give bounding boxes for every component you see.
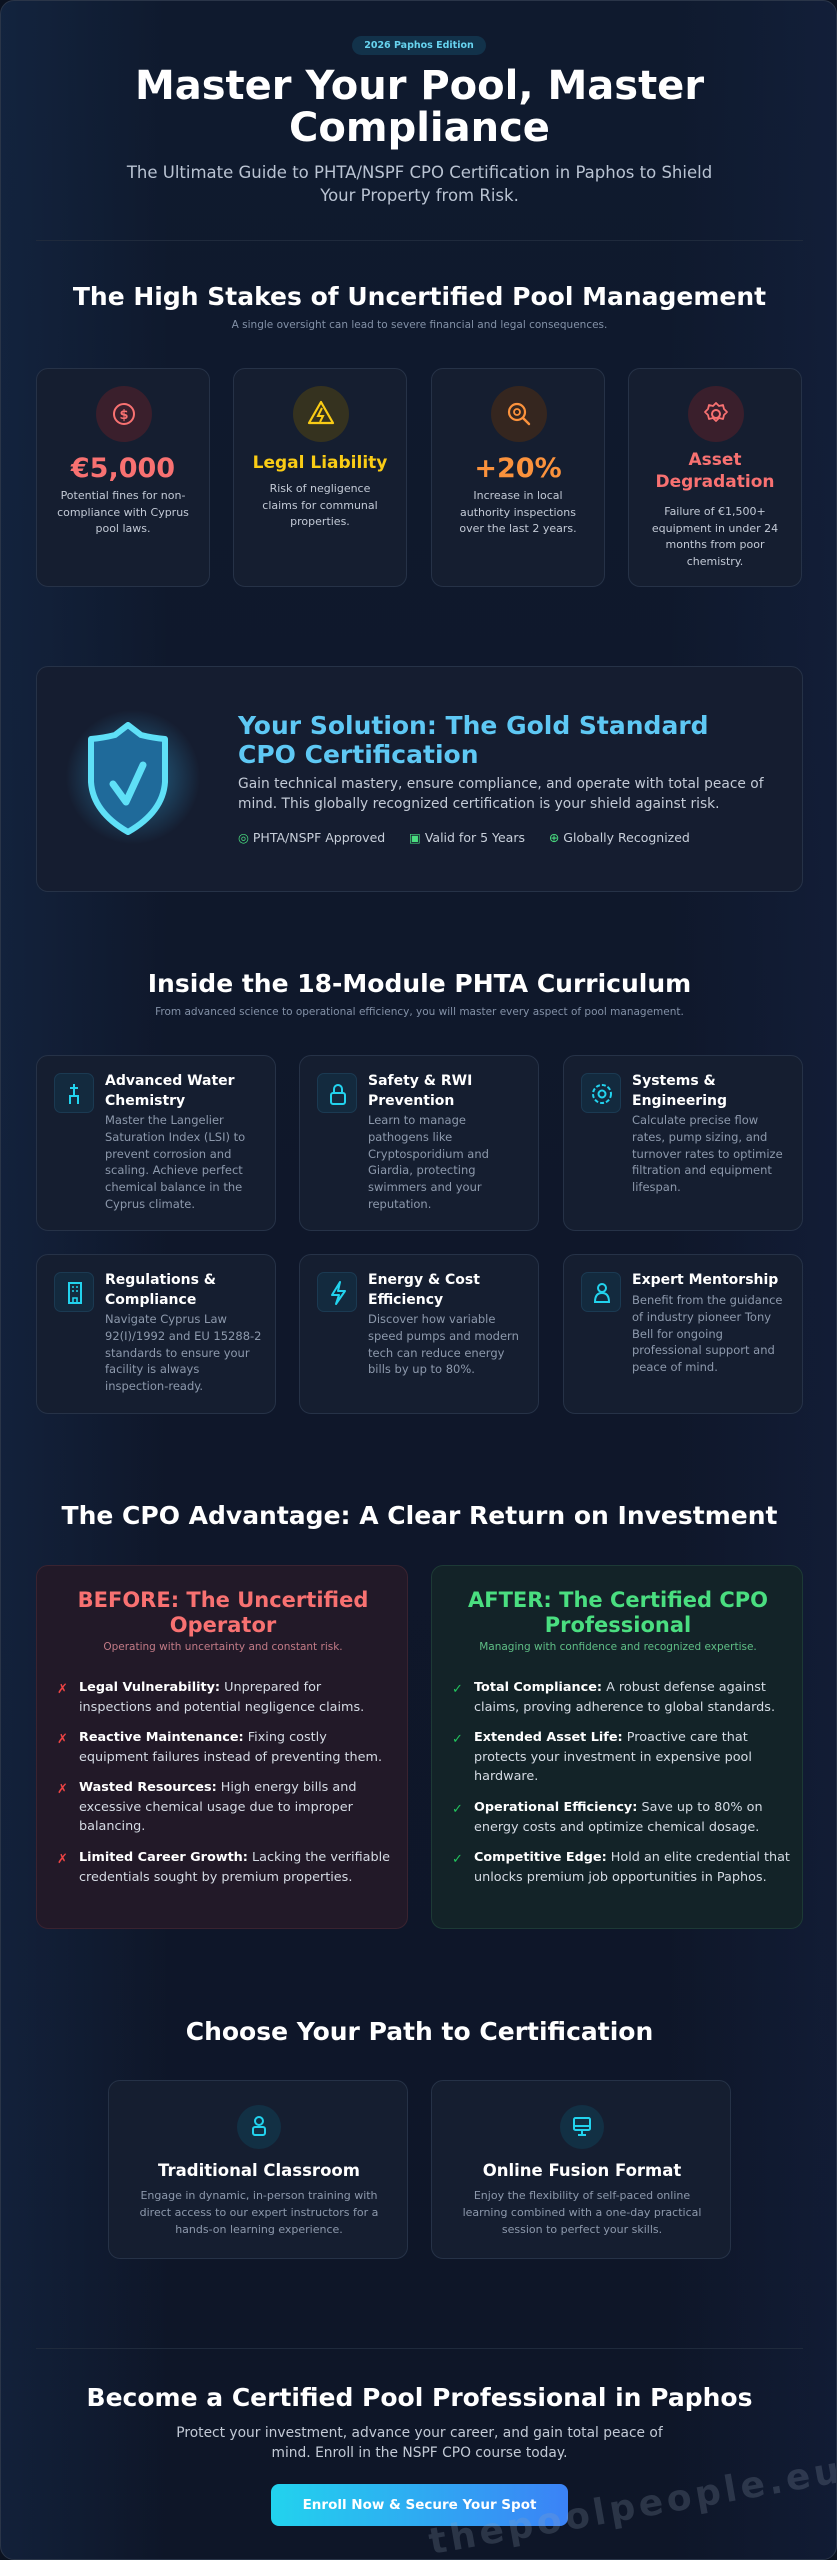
solution heading: Your Solution: The Gold Standard CPO Certification bbox=[238, 711, 709, 769]
panel: module energy bbox=[299, 1254, 539, 1414]
subheading: high stakes: A single oversight can lead to severe financial and legal consequences. bbox=[232, 319, 607, 331]
stat description: Failure of €1,500+ equipment in under 24 months from poor chemistry. bbox=[652, 505, 778, 568]
after list: Competitive Edge: Hold an elite credential that unlocks premium job opportunities in Paphos. bbox=[474, 1850, 790, 1884]
after list bbox=[452, 1680, 790, 1884]
panel: module mentorship bbox=[563, 1254, 803, 1414]
after list: Extended Asset Life: Proactive care that protects your investment in expensive pool hardware. bbox=[474, 1730, 752, 1784]
stat value: Legal Liability bbox=[253, 453, 387, 473]
stat value: Asset bbox=[688, 450, 742, 470]
panel: before bbox=[36, 1565, 408, 1929]
panel: module safety: Learn to manage pathogens like Cryptosporidium and Giardia, protecting swimmers and your reputation. bbox=[368, 1113, 489, 1211]
panel: module water chemistry bbox=[36, 1055, 276, 1231]
heading: advantage: The CPO Advantage: A Clear Return on Investment bbox=[62, 1501, 777, 1530]
stat value: +20% bbox=[474, 453, 562, 484]
stat value bbox=[655, 450, 775, 492]
badges: ◎ PHTA/NSPF Approved ▣ Valid for 5 Years ⊕ Globally Recognized bbox=[238, 830, 690, 845]
icon: euro coin: $ bbox=[119, 408, 129, 423]
before list: ✗ bbox=[57, 1782, 68, 1797]
panel: solution bbox=[36, 666, 803, 892]
panel: stat asset bbox=[628, 368, 802, 587]
icon: lock bbox=[317, 1073, 357, 1113]
before heading: BEFORE: The Uncertified bbox=[78, 1588, 368, 1612]
button: enroll: Enroll Now & Secure Your Spot bbox=[303, 2497, 536, 2513]
after list: ✓ bbox=[452, 1732, 463, 1747]
solution text: Gain technical mastery, ensure compliance, and operate with total peace of mind. This globally recognized certification is your shield against risk. bbox=[238, 776, 764, 812]
after list: ✓ bbox=[452, 1802, 463, 1817]
panel: module systems: Systems & Engineering bbox=[632, 1073, 727, 1108]
before list: ✗ bbox=[57, 1682, 68, 1697]
icon: gear bbox=[581, 1073, 621, 1113]
after heading bbox=[468, 1588, 768, 1637]
icon: shield bbox=[71, 715, 195, 839]
panel: module systems bbox=[563, 1055, 803, 1231]
panel: module energy: Energy & Cost Efficiency bbox=[368, 1272, 480, 1308]
panel: module safety: Safety & RWI Prevention bbox=[368, 1073, 472, 1108]
before list: ✗ bbox=[57, 1732, 68, 1747]
before list: Limited Career Growth: Lacking the verifiable credentials sought by premium properties. bbox=[79, 1850, 390, 1884]
panel: module water chemistry: Master the Langelier Saturation Index (LSI) to prevent corrosion and scaling. Achieve perfect chemical balance in the Cyprus climate. bbox=[105, 1113, 245, 1211]
subheading: curriculum: From advanced science to operational efficiency, you will master every aspect of pool management. bbox=[155, 1006, 684, 1018]
icon: classroom bbox=[237, 2105, 281, 2149]
title bbox=[135, 63, 704, 151]
online text: Enjoy the flexibility of self-paced online learning combined with a one-day practical session to perfect your skills. bbox=[463, 2189, 701, 2236]
classroom text: Engage in dynamic, in-person training with direct access to our expert instructors for a hands-on learning experience. bbox=[140, 2189, 378, 2236]
before heading: Operator bbox=[170, 1613, 276, 1637]
before sub: Operating with uncertainty and constant risk. bbox=[103, 1641, 343, 1653]
icon: monitor bbox=[560, 2105, 604, 2149]
stat value: €5,000 bbox=[71, 453, 175, 484]
stat description: Risk of negligence claims for communal properties. bbox=[262, 482, 378, 528]
heading: CTA: Become a Certified Pool Professional in Paphos bbox=[87, 2383, 752, 2412]
icon: chemistry bbox=[54, 1073, 94, 1113]
badge: edition bbox=[352, 36, 486, 55]
after list: Operational Efficiency: Save up to 80% on energy costs and optimize chemical dosage. bbox=[474, 1800, 763, 1834]
stat description: Potential fines for non-compliance with Cyprus pool laws. bbox=[57, 489, 189, 535]
CTA text: Protect your investment, advance your career, and gain total peace of mind. Enroll in the NSPF CPO course today. bbox=[176, 2425, 663, 2461]
icon: building bbox=[54, 1272, 94, 1312]
title: Compliance bbox=[289, 105, 550, 151]
after list: Total Compliance: A robust defense against claims, proving adherence to global standards. bbox=[474, 1680, 775, 1714]
panel: classroom bbox=[108, 2080, 408, 2259]
panel: module energy: Discover how variable speed pumps and modern tech can reduce energy bills by up to 80%. bbox=[368, 1312, 519, 1376]
stat value: Degradation bbox=[655, 472, 775, 492]
panel: module regulations: Navigate Cyprus Law 92(I)/1992 and EU 15288-2 standards to ensure your facility is always inspection-ready. bbox=[105, 1312, 261, 1393]
panel: module mentorship: Expert Mentorship bbox=[632, 1272, 778, 1288]
stat description: Increase in local authority inspections over the last 2 years. bbox=[459, 489, 577, 535]
before list: Reactive Maintenance: Fixing costly equipment failures instead of preventing them. bbox=[79, 1730, 382, 1764]
subtitle: The Ultimate Guide to PHTA/NSPF CPO Certification in Paphos to Shield Your Property from Risk. bbox=[127, 163, 712, 205]
heading: high stakes: The High Stakes of Uncertified Pool Management bbox=[73, 282, 766, 311]
panel: module systems: Calculate precise flow rates, pump sizing, and turnover rates to optimize filtration and equipment lifespan. bbox=[632, 1113, 783, 1194]
before list bbox=[57, 1680, 390, 1884]
panel: online bbox=[431, 2080, 731, 2259]
after heading: AFTER: The Certified CPO bbox=[468, 1588, 768, 1612]
panel: stat legal bbox=[233, 368, 407, 587]
panel: module regulations: Regulations & Compliance bbox=[105, 1272, 216, 1308]
after heading: Professional bbox=[545, 1613, 691, 1637]
badge: edition: 2026 Paphos Edition bbox=[364, 40, 474, 51]
title: Master Your Pool, Master bbox=[135, 63, 704, 109]
icon: euro coin bbox=[96, 386, 152, 442]
after sub: Managing with confidence and recognized expertise. bbox=[479, 1641, 757, 1653]
icon: magnifier bbox=[491, 386, 547, 442]
heading: curriculum: Inside the 18-Module PHTA Curriculum bbox=[148, 969, 691, 998]
button: enroll bbox=[271, 2484, 568, 2526]
panel: stat fines bbox=[36, 368, 210, 587]
before list: Wasted Resources: High energy bills and excessive chemical usage due to improper balancing. bbox=[79, 1780, 356, 1834]
icon: warning bbox=[293, 386, 349, 442]
after list: ✓ bbox=[452, 1852, 463, 1867]
before list: Legal Vulnerability: Unprepared for inspections and potential negligence claims. bbox=[79, 1680, 364, 1714]
panel: module safety bbox=[299, 1055, 539, 1231]
classroom title: Traditional Classroom bbox=[158, 2161, 360, 2180]
panel: module regulations bbox=[36, 1254, 276, 1414]
icon: bolt bbox=[317, 1272, 357, 1312]
icon: gear bbox=[688, 386, 744, 442]
panel: module mentorship: Benefit from the guidance of industry pioneer Tony Bell for ongoing professional support and peace of mind. bbox=[632, 1293, 782, 1374]
icon: person bbox=[581, 1272, 621, 1312]
online title: Online Fusion Format bbox=[483, 2161, 681, 2180]
before list: ✗ bbox=[57, 1852, 68, 1867]
after list: ✓ bbox=[452, 1682, 463, 1697]
panel: module water chemistry: Advanced Water Chemistry bbox=[105, 1073, 235, 1108]
panel: after bbox=[431, 1565, 803, 1929]
panel: stat inspections bbox=[431, 368, 605, 587]
before heading bbox=[78, 1588, 368, 1637]
heading: choose path: Choose Your Path to Certification bbox=[186, 2017, 653, 2046]
